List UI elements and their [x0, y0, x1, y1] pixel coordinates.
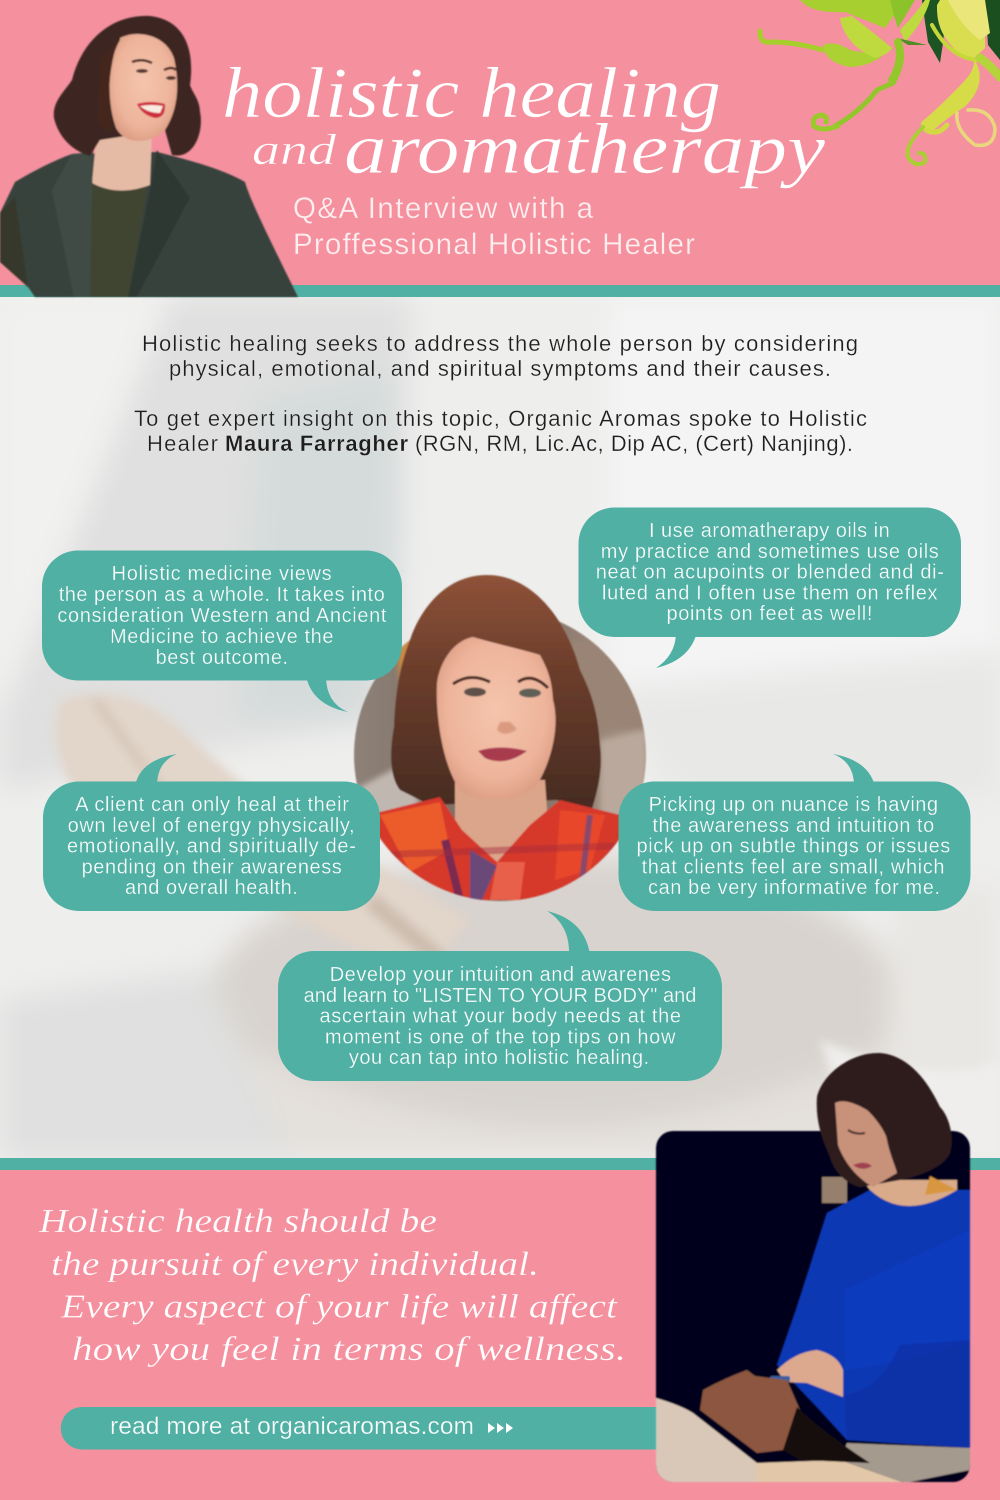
speech bubble: energy level: own level of energy physically, [68, 815, 355, 837]
quote: how you feel in terms of wellness. [72, 1331, 626, 1368]
photo: healer treating client [656, 1053, 970, 1483]
speech bubble: nuance: Picking up on nuance is having [649, 794, 938, 816]
speech bubble: intuition tip: you can tap into holistic healing. [349, 1047, 649, 1069]
speech bubble: holistic medicine: consideration Western and Ancient [57, 605, 387, 627]
intro text: Holistic healing seeks to address the whole person by considering [142, 331, 858, 356]
speech bubble: holistic medicine: best outcome. [156, 647, 288, 669]
icon: ylang ylang flowers [760, 0, 1000, 164]
intro text [134, 331, 867, 456]
subtitle: Q&A Interview with a [293, 192, 594, 225]
speech bubble: nuance: can be very informative for me. [648, 877, 940, 899]
speech bubble: nuance: that clients feel are small, which [642, 856, 944, 878]
speech bubble: aromatherapy oils [578, 508, 961, 668]
speech bubble: holistic medicine: Medicine to achieve the [110, 626, 334, 648]
speech bubble: aromatherapy oils: points on feet as well! [666, 603, 872, 625]
speech bubble: aromatherapy oils: neat on acupoints or blended and di- [596, 562, 944, 584]
photo: smiling woman in dark jacket [0, 16, 298, 297]
speech bubble: intuition tip: ascertain what your body needs at the [320, 1006, 681, 1028]
speech bubble: energy level: A client can only heal at their [75, 794, 349, 816]
call to action pill: read more at organicaromas.com [110, 1413, 474, 1440]
intro text: Healer [147, 431, 218, 456]
speech bubble: intuition tip: Develop your intuition and awarenes [330, 964, 671, 986]
speech bubble: energy level [43, 754, 380, 911]
header band [0, 0, 1000, 297]
quote: the pursuit of every individual. [51, 1246, 539, 1283]
speech bubble: holistic medicine [42, 550, 402, 712]
speech bubble: nuance: the awareness and intuition to [652, 815, 934, 837]
speech bubble: energy level: pending on their awareness [82, 856, 342, 878]
speech bubble: energy level: and overall health. [125, 877, 298, 899]
speech bubble: nuance: pick up on subtle things or issues [636, 836, 950, 858]
speech bubble: intuition tip [278, 911, 722, 1081]
speech bubble: aromatherapy oils: I use aromatherapy oils in [649, 520, 890, 542]
speech bubble: intuition tip: and learn to "LISTEN TO YOUR BODY" and [304, 985, 696, 1007]
title: and [252, 127, 337, 174]
speech bubble: intuition tip: moment is one of the top tips on how [325, 1026, 676, 1048]
speech bubble: aromatherapy oils: luted and I often use them on reflex [602, 582, 938, 604]
quote: Every aspect of your life will affect [60, 1288, 618, 1326]
portrait: Maura Farragher in circle [354, 575, 646, 901]
intro text: physical, emotional, and spiritual symptoms and their causes. [169, 356, 831, 381]
intro text: Maura Farragher [225, 431, 408, 456]
title: holistic healing [222, 53, 721, 133]
title: aromatherapy [344, 109, 825, 189]
speech bubble: holistic medicine: Holistic medicine views [112, 563, 332, 585]
background: washed-out photo of pestle and bowl [0, 297, 1000, 1158]
subtitle: Proffessional Holistic Healer [293, 228, 695, 261]
quote [38, 1203, 626, 1368]
speech bubble: energy level: emotionally, and spiritually de- [67, 836, 356, 858]
intro text: (RGN, RM, Lic.Ac, Dip AC, (Cert) Nanjing). [415, 431, 853, 456]
footer band [0, 1158, 1000, 1500]
speech bubble: nuance [618, 754, 970, 911]
speech bubble: holistic medicine: the person as a whole. It takes into [59, 584, 385, 606]
subtitle [293, 192, 695, 261]
quote: Holistic health should be [38, 1203, 437, 1240]
call to action pill [61, 1407, 662, 1450]
intro text: To get expert insight on this topic, Organic Aromas spoke to Holistic [134, 406, 867, 431]
title [222, 53, 825, 189]
speech bubble: aromatherapy oils: my practice and sometimes use oils [601, 541, 939, 563]
